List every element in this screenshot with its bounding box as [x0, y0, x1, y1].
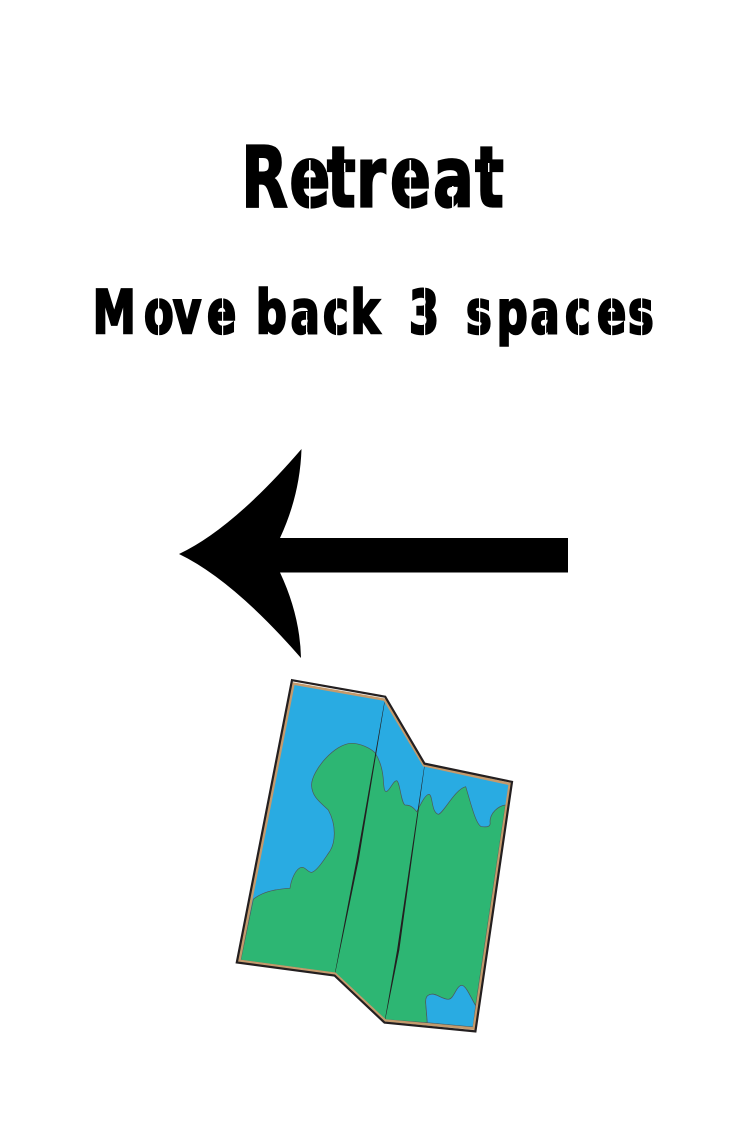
- icon: left arrow: [179, 449, 568, 658]
- map fold lines: [335, 702, 425, 1020]
- icon: folded map: [237, 680, 512, 1031]
- subtitle: Move back 3 spaces: [93, 278, 654, 348]
- title: Retreat: [241, 130, 504, 227]
- map water: [239, 684, 510, 1029]
- map paper edge: [239, 684, 510, 1029]
- map outer frame: [237, 680, 512, 1031]
- map land: [241, 743, 505, 1023]
- map lake: [426, 985, 476, 1027]
